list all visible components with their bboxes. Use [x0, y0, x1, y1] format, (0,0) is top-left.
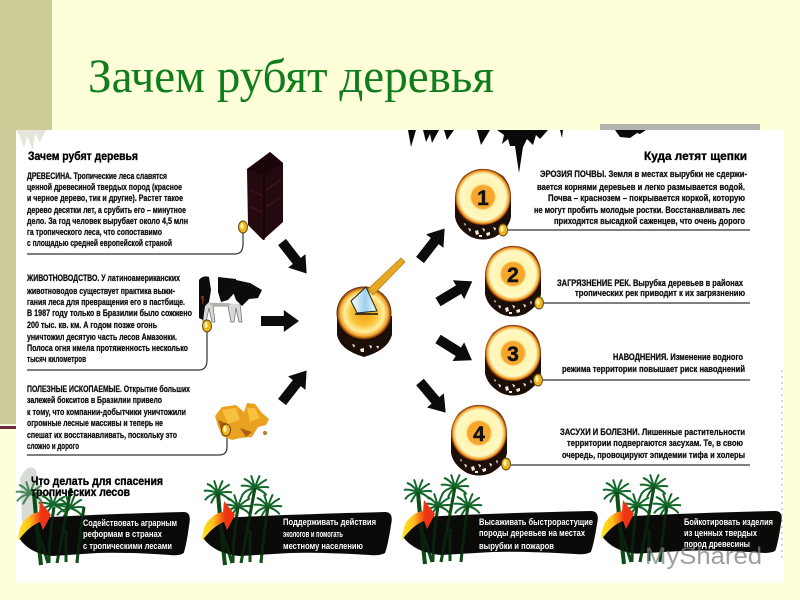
margin print specks [781, 370, 783, 560]
arrow: timber to centre [273, 235, 315, 280]
sidebar accent line [0, 426, 16, 429]
banner text 1: Содействовать аграрным [83, 518, 177, 528]
icon: bulb cattle [202, 320, 212, 332]
text block: droughts and disease: ЗАСУХИ И БОЛЕЗНИ. Лишенные растительности [560, 427, 745, 437]
arrow: to effect 2 [432, 272, 478, 311]
palm silhouettes along top edge [408, 130, 646, 173]
text block: timber: ДРЕВЕСИНА. Тропические леса славятся [27, 171, 167, 181]
text block: minerals: к тому, что компании-добытчики уничтожили [27, 407, 186, 417]
icon: bulb 1 [498, 224, 508, 236]
banner text 3: вырубки и пожаров [479, 541, 554, 551]
icon: bulb 4 [502, 458, 510, 470]
arrow: to effect 3 [432, 330, 478, 370]
heading: what to do: Что делать для спасения [31, 476, 163, 488]
action banner 3 [402, 475, 598, 564]
stump 1 [455, 169, 511, 240]
text block: soil erosion: ЭРОЗИЯ ПОЧВЫ. Земля в местах вырубки не сдержи- [540, 169, 747, 179]
text block: cattle: гания леса для превращения его в пастбище. [27, 297, 185, 307]
title: Зачем рубят деревья [88, 50, 494, 103]
heading: what to do [31, 476, 163, 499]
arrow: minerals to centre [273, 364, 315, 409]
text block: timber: га тропического леса, что сопоставимо [27, 227, 162, 237]
text block: minerals: ПОЛЕЗНЫЕ ИСКОПАЕМЫЕ. Открытие больших [27, 384, 190, 394]
text block: cattle: 200 тыс. кв. км. А годом позже огонь [27, 320, 157, 330]
icon: wooden bookcase [247, 152, 283, 240]
text block: floods: НАВОДНЕНИЯ. Изменение водного [613, 352, 743, 362]
icon: cow [199, 276, 262, 322]
text block: timber: дерево десятки лет, а срубить его – минутное [27, 205, 186, 215]
banner text 2: местному населению [283, 541, 363, 551]
arrow: cattle to centre [261, 310, 299, 332]
banner text 3: породы деревьев на местах [479, 528, 585, 538]
text block: river pollution [557, 278, 745, 298]
icon: bulb timber [238, 221, 248, 233]
panel: infographic [16, 130, 784, 583]
text block: droughts and disease: территории подвергаются засухам. Те, в свою [567, 438, 743, 448]
text block: timber: дело. За год человек вырубает около 4,5 млн [27, 216, 188, 226]
banner text 2: экологов и помогать [283, 529, 343, 539]
icon: bulb 2 [534, 297, 544, 309]
text block: river pollution: тропических рек приводит к их загрязнению [575, 288, 745, 298]
stump 4 [451, 405, 507, 476]
text block: timber [27, 171, 188, 248]
text block: minerals [27, 384, 190, 451]
text block: cattle: В 1987 году только в Бразилии было сожжено [27, 308, 192, 318]
palm leaf top left [16, 130, 46, 150]
heading: why trees are cut: Зачем рубят деревья [28, 151, 138, 163]
text block: minerals: спешат их восстанавливать, поскольку это [27, 430, 177, 440]
banner text 4: из ценных твердых [684, 528, 757, 538]
text block: minerals: сложно и дорого [27, 441, 79, 451]
icon: central stump with axe [336, 258, 405, 357]
leader line 2 [544, 302, 750, 304]
text block: river pollution: ЗАГРЯЗНЕНИЕ РЕК. Вырубка деревьев в районах [557, 278, 743, 288]
leader line: timber [27, 232, 243, 254]
banner text 4: Бойкотировать изделия [684, 517, 773, 527]
text block: timber: с площадью средней европейской страной [27, 238, 172, 248]
text block: soil erosion: вается корнями деревьев и легко размывается водой. [537, 182, 745, 192]
stump 4: 4 [473, 423, 485, 446]
stump 3: 3 [507, 343, 519, 366]
watermark: MyShared [645, 543, 762, 570]
action banner 4 [601, 475, 782, 564]
icon: bauxite nuggets [215, 403, 269, 440]
action banner 1 [18, 488, 190, 565]
text block: timber: и черное дерево, тик и другие). Растет такое [27, 193, 183, 203]
arrow: to effect 4 [412, 375, 454, 420]
heading: what to do: тропических лесов [31, 487, 130, 499]
text block: droughts and disease [560, 427, 745, 460]
heading: where the chips fly: Куда летят щепки [644, 151, 747, 163]
text block: cattle: ЖИВОТНОВОДСТВО. У латиноамериканских [26, 273, 180, 283]
icon: bulb minerals [222, 424, 230, 436]
banner text 3: Высаживать быстрорастущие [479, 517, 593, 527]
text block: soil erosion: не могут пробить молодые ростки. Восстанавливать лес [534, 205, 745, 215]
grey accent bar [600, 124, 760, 131]
stump 1: 1 [477, 187, 489, 210]
grey haze behind bottom heading [20, 467, 42, 522]
dim palm behind heading [17, 482, 43, 504]
banner text 1 [83, 518, 177, 551]
text block: floods [562, 352, 745, 374]
leader line 4 [511, 464, 750, 466]
text block: cattle [26, 273, 192, 364]
leader line: minerals [27, 436, 227, 455]
text block: cattle: животноводов существует практика выжи- [26, 286, 175, 296]
stump 2: 2 [507, 264, 519, 287]
text block: floods: режима территории повышает риск наводнений [562, 364, 745, 374]
leader line: cattle [27, 332, 207, 370]
text block: timber: ценной древесиной твердых пород (красное [27, 182, 182, 192]
leader line 3 [543, 379, 750, 381]
text block: cattle: тысяч километров [27, 354, 86, 364]
action banner 2 [202, 476, 392, 565]
banner text 1: с тропическими лесами [83, 541, 172, 551]
text block: soil erosion: приходится высадкой саженцев, что очень дорого [554, 216, 745, 226]
text block: droughts and disease: очередь, провоцируют эпидемии тифа и холеры [562, 450, 745, 460]
text block: soil erosion: Почва – краснозем – покрывается коркой, которую [548, 193, 745, 203]
banner text 4: пород древесины [684, 539, 750, 549]
banner text 4 [684, 517, 773, 549]
leader line 1 [508, 229, 750, 231]
stump 2 [485, 246, 541, 316]
banner text 2 [283, 517, 376, 551]
banner text 1: реформам в странах [83, 529, 162, 539]
arrow: to effect 1 [411, 222, 453, 267]
icon: bulb 3 [534, 374, 542, 386]
text block: cattle: Полоса огня имела протяженность несколько [27, 343, 188, 353]
banner text 2: Поддерживать действия [283, 517, 376, 527]
text block: minerals: огромные лесные массивы и теперь не [27, 418, 163, 428]
text block: soil erosion [534, 169, 747, 226]
banner text 3 [479, 517, 593, 551]
stump 3 [485, 325, 541, 396]
text block: cattle: уничтожил десятую часть лесов Амазонки. [27, 332, 177, 342]
left sidebar stripe [0, 0, 52, 424]
text block: minerals: залежей бокситов в Бразилии привело [27, 395, 162, 405]
